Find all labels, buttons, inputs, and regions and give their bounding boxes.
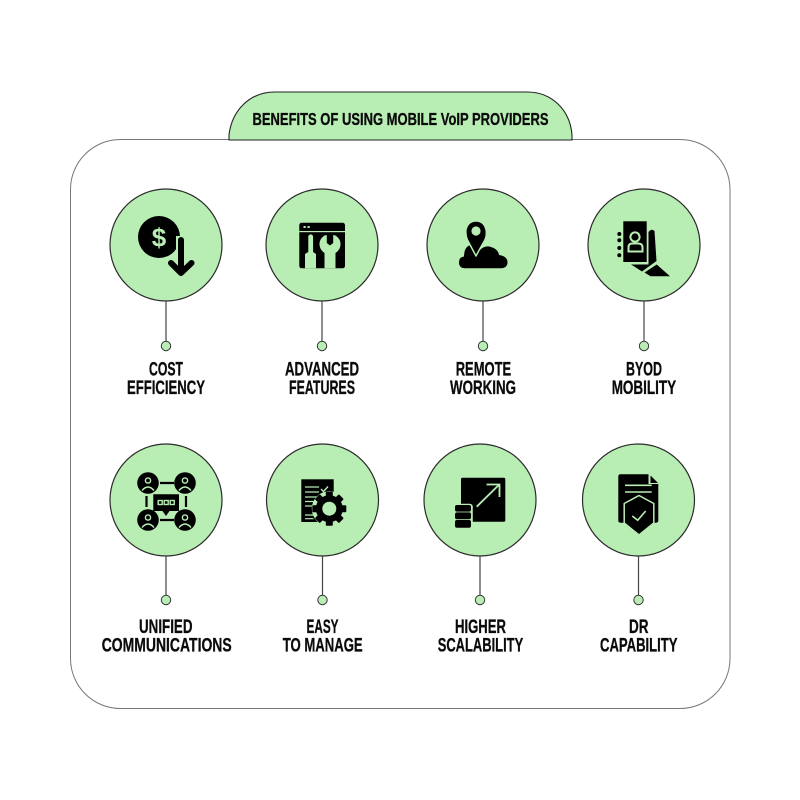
benefit: remote working xyxy=(427,189,539,399)
icon: hand holding phone xyxy=(617,221,670,276)
label: REMOTE xyxy=(456,360,511,380)
benefit: advanced features xyxy=(266,189,378,399)
title tab xyxy=(229,92,572,140)
benefit: higher scalability: SCALABILITY xyxy=(438,636,523,656)
benefit: cost efficiency: EFFICIENCY xyxy=(127,378,205,399)
label: DR xyxy=(629,617,649,638)
icon: location pin on cloud xyxy=(459,222,508,268)
label: BYOD xyxy=(626,360,662,380)
panel: benefits container xyxy=(70,140,730,708)
benefit: DR capability: CAPABILITY xyxy=(600,636,678,656)
icon: document with gear xyxy=(301,479,347,526)
label: UNIFIED xyxy=(139,617,192,638)
icon: connected people with chat bubble xyxy=(137,472,196,531)
icon: scaling square with stack xyxy=(454,478,505,529)
benefit: easy to manage: TO MANAGE xyxy=(283,636,363,656)
label: ADVANCED xyxy=(285,360,359,380)
benefit: advanced features: FEATURES xyxy=(289,378,355,399)
benefit: unified communications: COMMUNICATIONS xyxy=(102,636,232,656)
icon: document with shield xyxy=(618,474,658,535)
benefit: higher scalability xyxy=(424,444,536,656)
label: EASY xyxy=(306,617,339,638)
benefit: cost efficiency xyxy=(110,189,222,399)
label: HIGHER xyxy=(455,617,506,638)
icon: dollar with down arrow xyxy=(138,216,192,273)
icon: window with tools xyxy=(299,223,345,268)
benefit: BYOD mobility xyxy=(588,189,700,399)
label: COST xyxy=(149,360,183,380)
benefit: DR capability xyxy=(582,444,694,656)
benefit: easy to manage xyxy=(266,444,378,656)
benefit: BYOD mobility: MOBILITY xyxy=(612,378,676,399)
benefit: remote working: WORKING xyxy=(450,378,516,399)
benefit: unified communications xyxy=(102,444,232,656)
title tab: BENEFITS OF USING MOBILE VoIP PROVIDERS xyxy=(252,109,548,129)
icon: dollar with down arrow: $ xyxy=(152,222,167,252)
